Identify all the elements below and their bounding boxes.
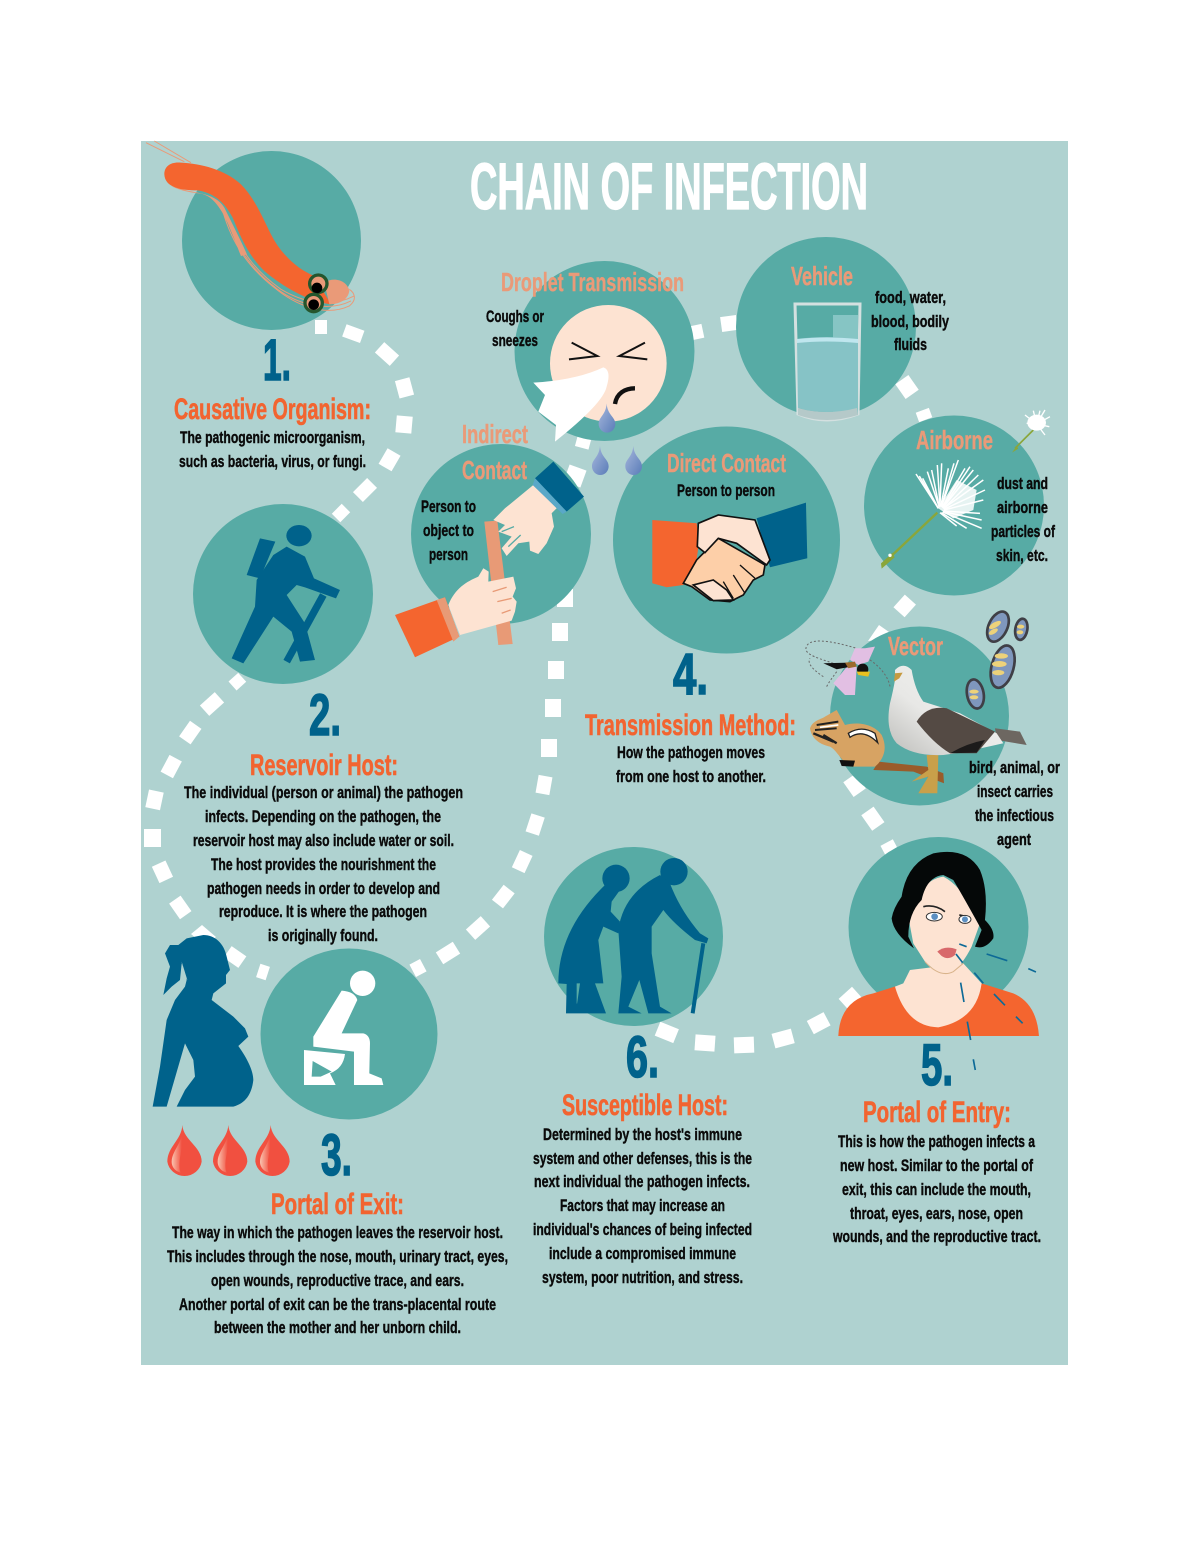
text: portal of entry description: throat, eyes, ears, nose, open bbox=[850, 1204, 1023, 1223]
dashed chain path bbox=[144, 315, 932, 1053]
label: vehicle: Vehicle bbox=[791, 261, 853, 291]
text: causative organism description bbox=[179, 428, 366, 471]
label: droplet transmission: Droplet Transmission bbox=[501, 267, 684, 297]
heading: transmission method: Transmission Method: bbox=[585, 709, 796, 742]
text: reservoir host description: The host provides the nourishment the bbox=[211, 855, 436, 874]
text: person to object to person: person bbox=[429, 545, 468, 564]
icon: sneezing face bbox=[533, 305, 667, 442]
text: susceptible host description: system, poor nutrition, and stress. bbox=[542, 1268, 743, 1287]
icon: hiker bbox=[232, 525, 340, 663]
text: person to object to person bbox=[421, 497, 476, 564]
text: coughs or sneezes bbox=[486, 307, 544, 350]
text: vector examples: the infectious bbox=[975, 806, 1054, 825]
text: susceptible host description: Factors that may increase an bbox=[560, 1196, 725, 1215]
text: reservoir host description: reproduce. It is where the pathogen bbox=[219, 902, 427, 921]
text: reservoir host description bbox=[184, 783, 463, 945]
text: susceptible host description bbox=[533, 1125, 752, 1287]
text: reservoir host description: is originally found. bbox=[268, 926, 378, 945]
icon: handshake bbox=[652, 503, 807, 602]
icon: droplets bbox=[592, 403, 642, 475]
text: vehicle examples bbox=[871, 288, 949, 354]
text: vector examples: agent bbox=[997, 830, 1031, 849]
icon: elderly couple bbox=[558, 858, 708, 1013]
text: portal of entry description: wounds, and the reproductive tract. bbox=[832, 1227, 1041, 1246]
text: susceptible host description: next individual the pathogen infects. bbox=[534, 1172, 750, 1191]
number 4: 4. bbox=[673, 642, 708, 707]
label: airborne: Airborne bbox=[916, 425, 993, 455]
heading: susceptible host: Susceptible Host: bbox=[562, 1089, 728, 1122]
text: airborne examples: particles of bbox=[991, 522, 1055, 541]
icon: chipmunk bbox=[810, 710, 944, 783]
text: portal of exit description: between the mother and her unborn child. bbox=[214, 1318, 461, 1337]
text: reservoir host description: reservoir host may also include water or soil. bbox=[193, 831, 454, 850]
text: portal of entry description: exit, this can include the mouth, bbox=[842, 1180, 1031, 1199]
icon: worm pathogen bbox=[146, 141, 354, 312]
text: portal of exit description: The way in which the pathogen leaves the reservoir host. bbox=[172, 1223, 503, 1242]
label: indirect contact bbox=[462, 419, 528, 485]
text: reservoir host description: pathogen needs in order to develop and bbox=[207, 879, 440, 898]
label: indirect contact: Contact bbox=[462, 455, 527, 485]
text: vector examples: bird, animal, or bbox=[969, 758, 1060, 777]
text: reservoir host description: The individual (person or animal) the pathogen bbox=[184, 783, 463, 802]
heading: portal of entry: Portal of Entry: bbox=[863, 1096, 1011, 1129]
number 5: 5. bbox=[921, 1033, 953, 1098]
number 6: 6. bbox=[626, 1025, 659, 1090]
text: susceptible host description: system and other defenses, this is the bbox=[533, 1149, 752, 1168]
text: vector examples: insect carries bbox=[977, 782, 1053, 801]
text: portal of exit description: open wounds, reproductive trace, and ears. bbox=[211, 1271, 464, 1290]
title: CHAIN OF INFECTION bbox=[470, 149, 868, 223]
icon: hands passing an object bbox=[395, 462, 584, 657]
text: vector examples bbox=[969, 758, 1060, 849]
label: direct contact: Direct Contact bbox=[667, 448, 786, 478]
label: vector: Vector bbox=[888, 631, 943, 661]
text: airborne examples: skin, etc. bbox=[996, 546, 1048, 565]
text: portal of entry description: This is how the pathogen infects a bbox=[838, 1132, 1035, 1151]
number 2: 2. bbox=[309, 683, 341, 748]
text: vehicle examples: food, water, bbox=[875, 288, 946, 307]
text: portal of exit description: Another portal of exit can be the trans-placental route bbox=[179, 1295, 496, 1314]
text: portal of entry description bbox=[832, 1132, 1041, 1246]
text: susceptible host description: Determined by the host's immune bbox=[543, 1125, 742, 1144]
text: portal of exit description: This includes through the nose, mouth, urinary tract, eyes, bbox=[167, 1247, 508, 1266]
text: person to object to person: object to bbox=[423, 521, 474, 540]
icon: blood drops bbox=[167, 1125, 290, 1176]
text: causative organism description: such as bacteria, virus, or fungi. bbox=[179, 452, 366, 471]
text: transmission method description: from one host to another. bbox=[616, 767, 766, 786]
text: transmission method description bbox=[616, 743, 766, 786]
number 3: 3. bbox=[321, 1123, 352, 1188]
panel: circles bbox=[182, 151, 1044, 1120]
text: airborne examples: airborne bbox=[997, 498, 1048, 517]
icon: woman portrait bbox=[838, 852, 1039, 1070]
text: transmission method description: How the pathogen moves bbox=[617, 743, 765, 762]
text: portal of exit description bbox=[167, 1223, 508, 1337]
icon: dandelion seeds bbox=[881, 410, 1050, 569]
heading: causative organism: Causative Organism: bbox=[174, 393, 371, 426]
icon: seagull bbox=[888, 666, 1027, 793]
text: reservoir host description: infects. Depending on the pathogen, the bbox=[205, 807, 441, 826]
text: coughs or sneezes: sneezes bbox=[492, 331, 538, 350]
icon: bee bbox=[806, 641, 890, 695]
text: susceptible host description: individual's chances of being infected bbox=[533, 1220, 752, 1239]
number 1: 1. bbox=[263, 328, 291, 393]
text: portal of entry description: new host. Similar to the portal of bbox=[840, 1156, 1033, 1175]
label: indirect contact: Indirect bbox=[462, 419, 528, 449]
text: person to object to person: Person to bbox=[421, 497, 476, 516]
panel: background bbox=[141, 141, 1068, 1365]
icon: person on toilet bbox=[304, 971, 383, 1085]
heading: portal of exit: Portal of Exit: bbox=[271, 1188, 404, 1221]
text: airborne examples: dust and bbox=[997, 474, 1048, 493]
text: airborne examples bbox=[991, 474, 1055, 565]
icon: glass of water bbox=[795, 304, 860, 420]
text: person to person: Person to person bbox=[677, 481, 775, 500]
text: susceptible host description: include a compromised immune bbox=[549, 1244, 736, 1263]
text: vehicle examples: fluids bbox=[894, 335, 927, 354]
heading: reservoir host: Reservoir Host: bbox=[250, 749, 398, 782]
icon: pregnant woman silhouette bbox=[153, 935, 253, 1107]
text: coughs or sneezes: Coughs or bbox=[486, 307, 544, 326]
text: vehicle examples: blood, bodily bbox=[871, 312, 949, 331]
icon: lice bbox=[965, 608, 1029, 710]
text: causative organism description: The pathogenic microorganism, bbox=[180, 428, 365, 447]
